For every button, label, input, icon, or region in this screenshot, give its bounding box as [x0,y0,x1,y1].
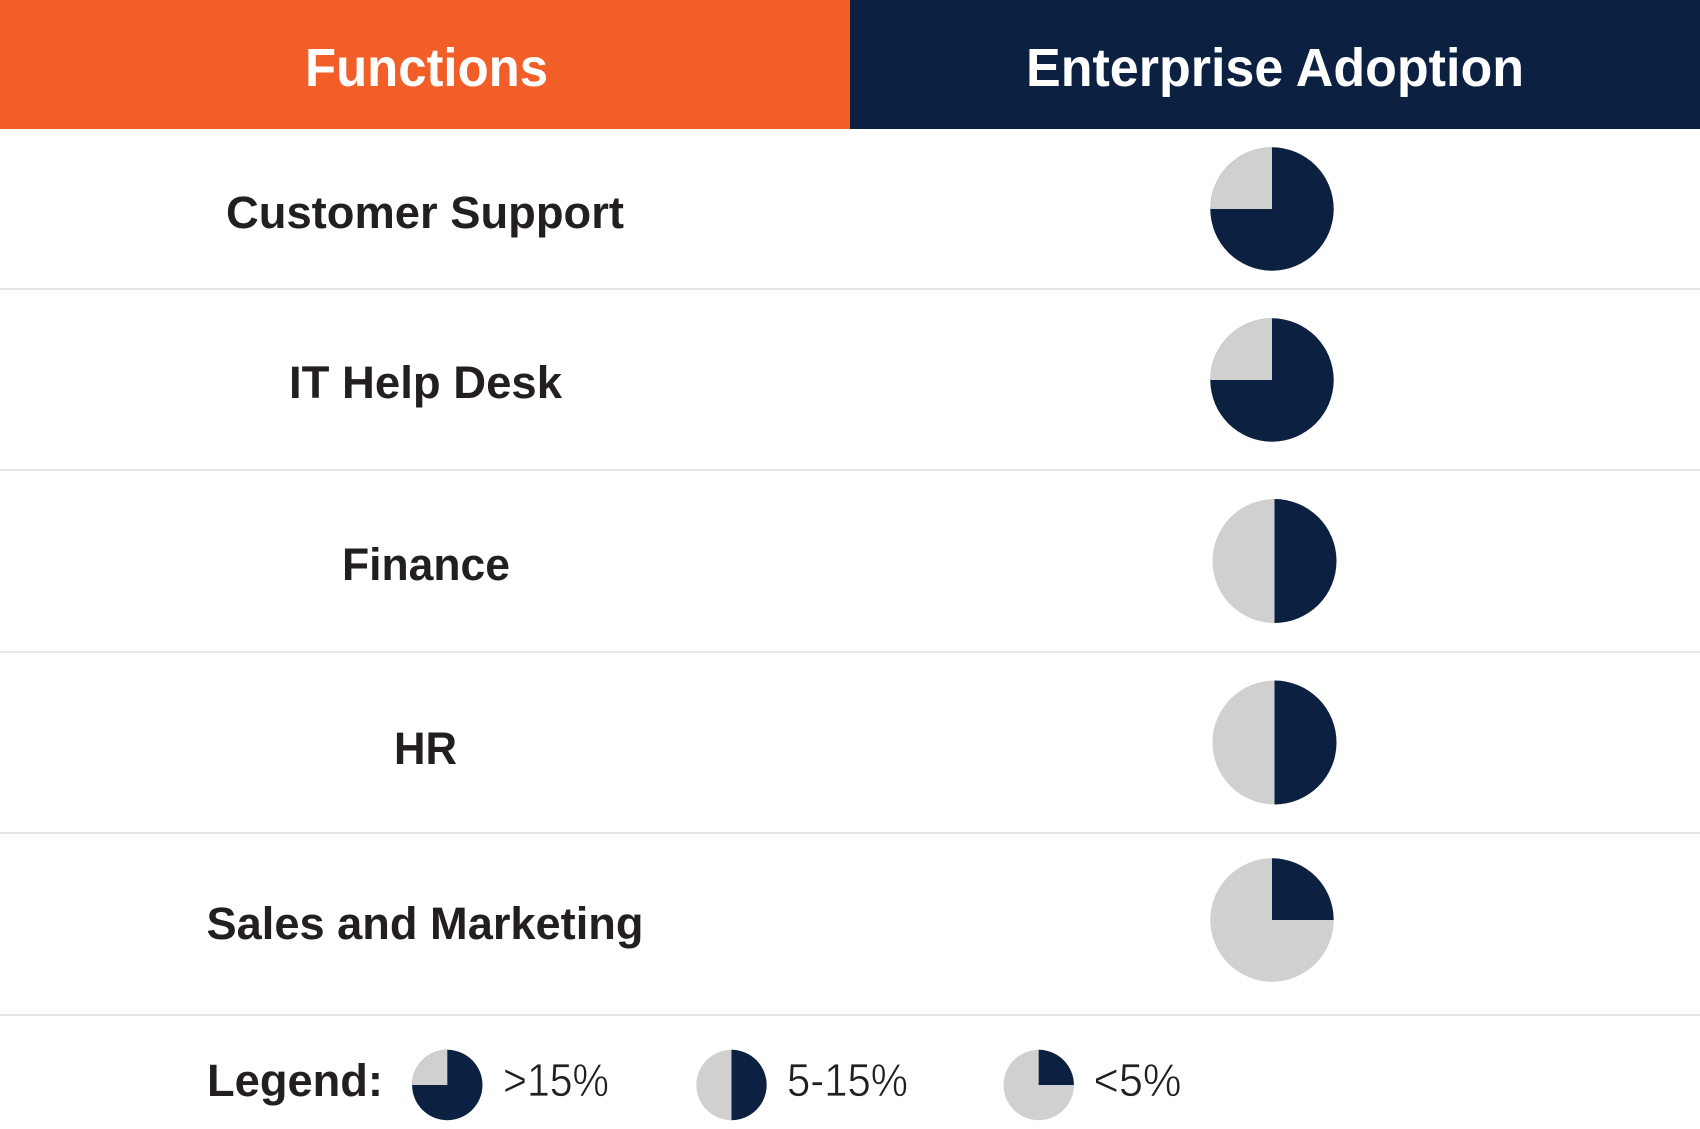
legend item: 5-15% [696,1050,908,1120]
row label: Finance: Finance [342,539,510,590]
legend item: under 5%: <5% [1094,1054,1182,1106]
row label: HR: HR [394,723,457,774]
legend item: over 15%: >15% [503,1054,609,1106]
legend title: Legend: [207,1055,383,1106]
legend item: over 15% [412,1050,609,1120]
pie: Finance, 5-15% [1212,499,1336,623]
legend [207,1050,1182,1120]
pie: IT Help Desk, over 15% [1210,318,1334,442]
header: Enterprise Adoption: Enterprise Adoption [1026,38,1524,98]
row label: Sales and Marketing: Sales and Marketing [206,898,644,949]
header: Functions [0,0,850,129]
legend item: 5-15%: 5-15% [787,1054,908,1106]
row label: IT Help Desk: IT Help Desk [289,357,563,408]
header: Functions: Functions [305,38,548,98]
pie: Customer Support, over 15% [1210,147,1334,271]
pie: Sales and Marketing, under 5% [1210,858,1334,982]
legend item: under 5% [1003,1050,1182,1120]
header: Enterprise Adoption [850,0,1700,129]
row label: Customer Support: Customer Support [226,187,624,238]
pie: HR, 5-15% [1212,680,1336,804]
